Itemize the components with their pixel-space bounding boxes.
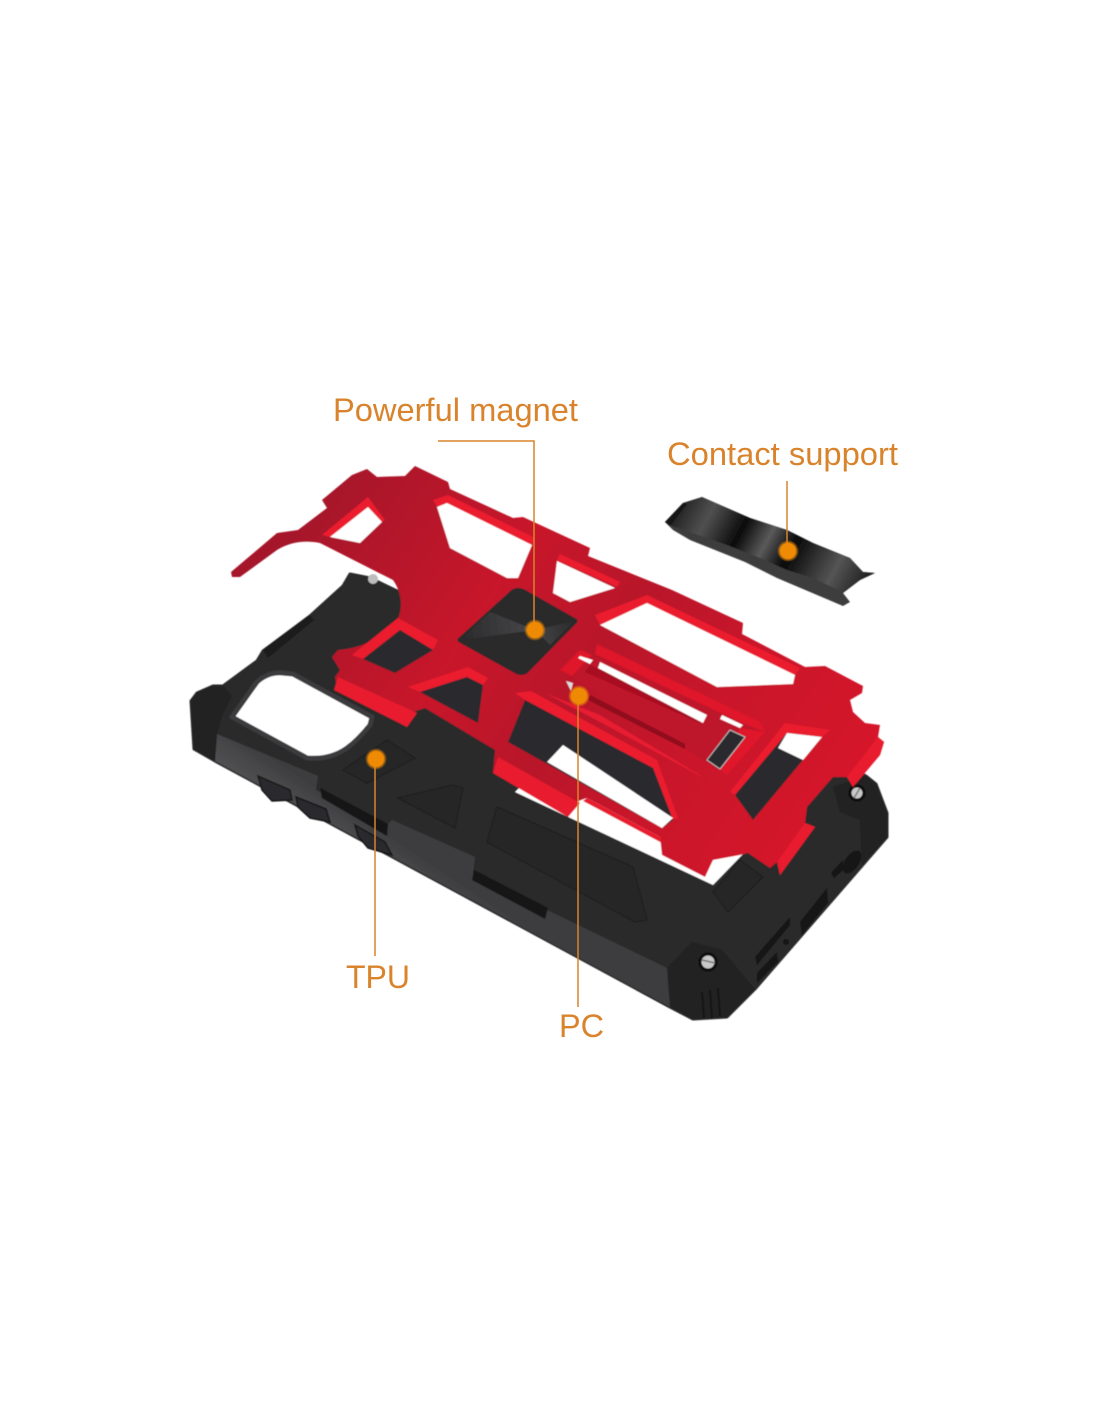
callout: Contact support [667,436,898,562]
bottom corner bumper [667,942,755,1019]
callout: TPU [346,748,410,995]
callout: Powerful magnet: Powerful magnet [333,392,578,428]
right corner bumper [833,776,887,865]
side slots [320,788,548,919]
callout: PC [559,685,604,1044]
top screw [850,786,864,800]
kickstand recess [545,644,765,777]
top left screw [368,574,378,584]
through holes [330,503,795,687]
case side wall [215,734,670,1007]
charging ports [755,847,865,983]
back panels [343,740,763,922]
callout: Powerful magnet [333,392,578,641]
white gap inside lower hole [547,745,673,828]
callout: TPU: TPU [346,959,410,995]
bottom screw [700,954,716,970]
magnet plate [460,590,575,672]
callout: PC: PC [559,1008,604,1044]
TPU case body [191,574,887,1019]
product illustration: exploded phone case [191,466,887,1019]
contact support clip [665,497,875,606]
large window [515,745,745,885]
bright edge bands [334,677,884,875]
callout: Contact support: Contact support [667,436,898,472]
corner bumper top left [191,686,232,761]
hole bevels [322,495,830,820]
inner frame top left [263,615,314,658]
PC red plate [231,466,884,877]
camera cut-out [232,673,372,758]
volume and side buttons [258,776,392,855]
bumper ribs [702,988,720,1018]
white gap inside right hole [778,733,822,760]
dark holes [363,630,822,828]
